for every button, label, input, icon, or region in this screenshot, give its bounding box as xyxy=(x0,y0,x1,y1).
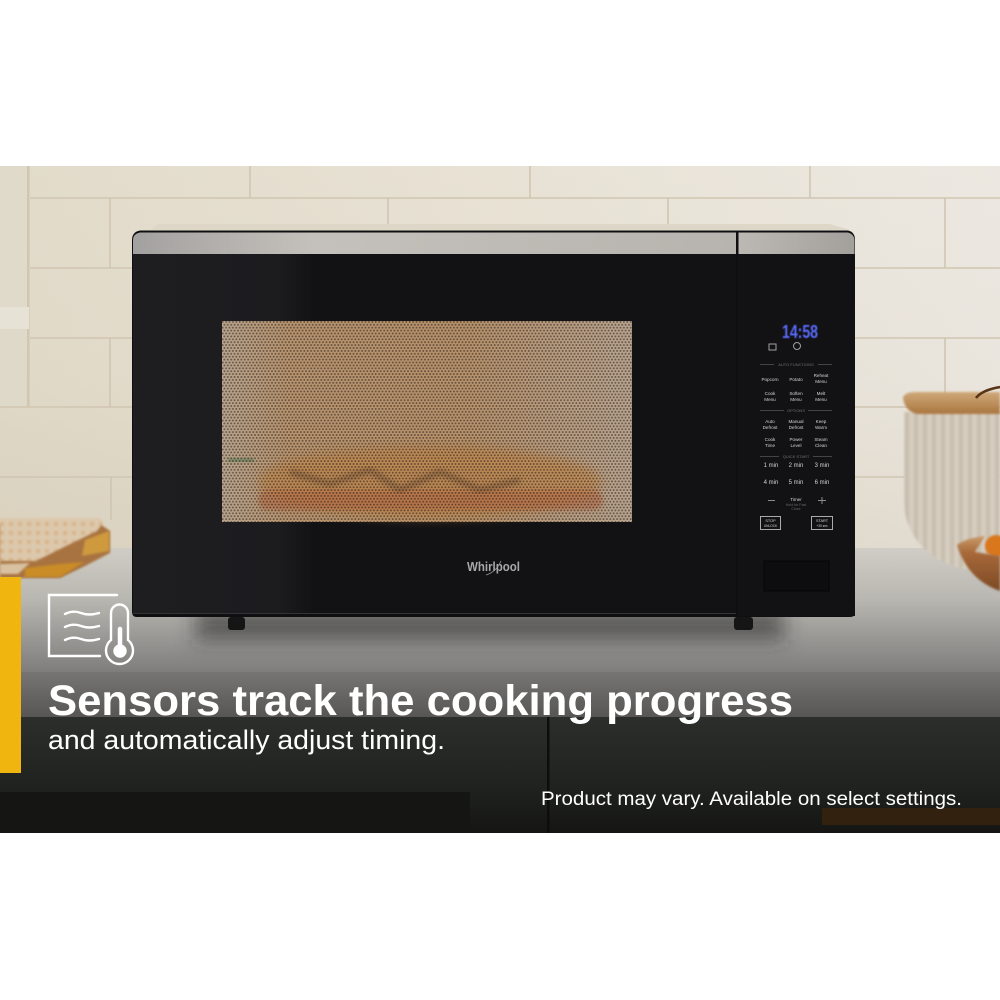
options buttons: OPTIONS xyxy=(787,408,805,413)
options buttons xyxy=(760,408,832,448)
kitchen photo xyxy=(0,166,1000,833)
options buttons: Steam xyxy=(814,437,828,442)
quick start buttons xyxy=(760,454,832,486)
options buttons: Manual xyxy=(788,419,804,424)
door window xyxy=(222,321,632,522)
quick start buttons: 3 min xyxy=(815,463,829,469)
food behind mesh xyxy=(228,446,603,518)
quick start buttons: 6 min xyxy=(815,480,829,486)
options buttons: Level xyxy=(791,443,801,448)
auto functions buttons xyxy=(760,362,832,402)
door release recess xyxy=(764,561,829,591)
countertop xyxy=(0,548,1000,718)
heading: Sensors track the cooking progress xyxy=(48,678,793,725)
start button: START xyxy=(816,519,829,523)
start button xyxy=(812,516,832,530)
brand logo: Whirlpool xyxy=(467,559,520,574)
ceramic jar with wooden lid xyxy=(903,387,1000,570)
door panel xyxy=(133,254,736,614)
stop button: STOP xyxy=(765,519,776,523)
status icons xyxy=(769,342,800,350)
quick start buttons: 4 min xyxy=(764,480,778,486)
subheading: and automatically adjust timing. xyxy=(48,725,445,755)
yellow accent bar xyxy=(0,577,21,773)
auto functions buttons: Soften xyxy=(789,391,803,396)
disclaimer: Product may vary. Available on select settings. xyxy=(541,789,962,810)
quick start buttons: 5 min xyxy=(789,480,803,486)
stop button: UNLOCK xyxy=(764,524,778,528)
options buttons: Power xyxy=(789,437,803,442)
digital clock display: 14:58 xyxy=(782,322,818,342)
auto functions buttons: Melt xyxy=(817,391,826,396)
auto functions buttons: Potato xyxy=(789,377,803,382)
left column molding xyxy=(0,166,30,406)
wooden bowl with orange xyxy=(957,535,1000,591)
timer controls: Close xyxy=(791,507,801,511)
quick start buttons: QUICK START xyxy=(783,454,810,459)
options buttons: Warm xyxy=(815,425,827,430)
dish towel xyxy=(0,518,110,578)
auto functions buttons: Menu xyxy=(815,379,827,384)
options buttons: Clean xyxy=(815,443,827,448)
cabinet front xyxy=(0,717,1000,833)
microwave xyxy=(132,224,855,630)
quick start buttons: 1 min xyxy=(764,463,778,469)
microwave top surface xyxy=(150,224,850,230)
counter front edge xyxy=(0,672,1000,718)
stainless top trim door xyxy=(133,232,736,254)
auto functions buttons: Menu xyxy=(764,397,776,402)
auto functions buttons: Reheat xyxy=(814,373,829,378)
auto functions buttons: Menu xyxy=(815,397,827,402)
microwave body xyxy=(132,230,855,617)
auto functions buttons: Popcorn xyxy=(761,377,779,382)
timer controls xyxy=(768,497,826,511)
timer controls: Hold for Fast xyxy=(786,503,806,507)
icon: sensor thermometer xyxy=(49,595,133,664)
options buttons: Keep xyxy=(816,419,827,424)
stop button xyxy=(760,516,780,530)
options buttons: Defrost xyxy=(763,425,778,430)
auto functions buttons: AUTO FUNCTIONS xyxy=(778,362,814,367)
options buttons: Cook xyxy=(765,437,776,442)
options buttons: Auto xyxy=(765,419,775,424)
options buttons: Defrost xyxy=(789,425,804,430)
auto functions buttons: Cook xyxy=(765,391,776,396)
control panel xyxy=(738,254,855,616)
stainless top trim panel xyxy=(738,232,854,254)
microwave shadow on counter xyxy=(195,610,785,640)
options buttons: Time xyxy=(765,443,775,448)
auto functions buttons: Menu xyxy=(790,397,802,402)
start button: +30 sec xyxy=(816,524,828,528)
timer controls: Timer xyxy=(790,497,802,502)
microwave feet xyxy=(228,617,753,630)
tiled wall xyxy=(0,166,1000,556)
quick start buttons: 2 min xyxy=(789,463,803,469)
